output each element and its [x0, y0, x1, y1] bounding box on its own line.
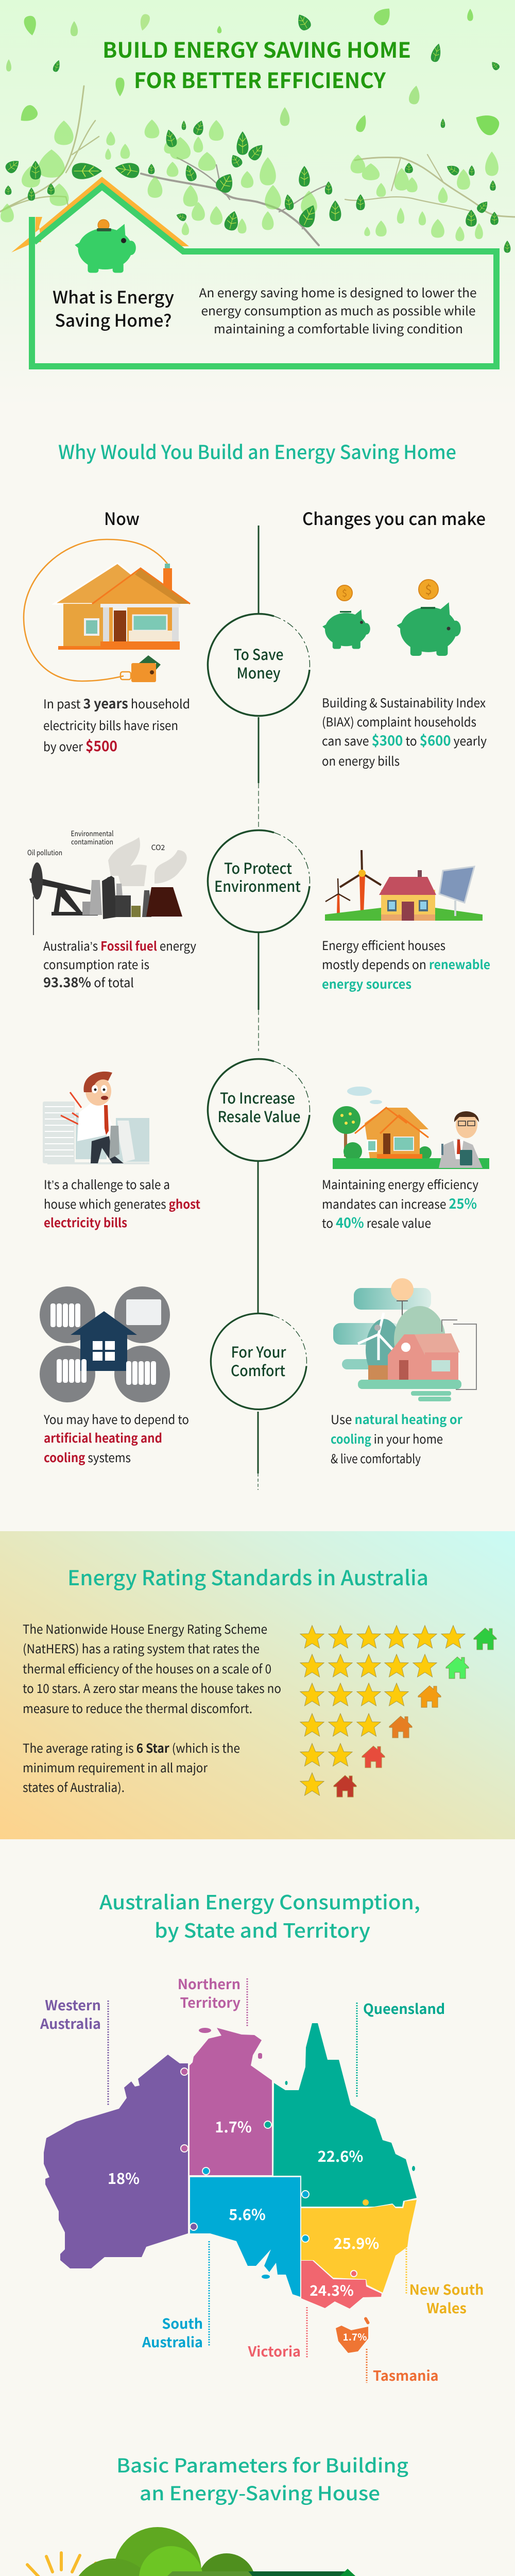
label: south australia: Australia	[142, 2331, 203, 2351]
text: ghost bills: house which generates ghost	[44, 1194, 200, 1212]
tree branches and leaves	[0, 86, 515, 253]
circle: to increase resale value	[208, 1059, 310, 1161]
circle: to save money: Money	[237, 662, 281, 683]
heading: why: Why Would You Build an Energy Saving Home	[58, 437, 456, 465]
icon: fossil fuel industry: contamination	[71, 837, 113, 847]
icon: house with power cord and wallet	[24, 539, 190, 682]
text: renewable	[322, 936, 490, 992]
roof	[167, 2571, 345, 2576]
panel: why build	[24, 437, 490, 1490]
heading: rating: Energy Rating Standards in Australia	[67, 1562, 428, 1591]
map: western australia	[44, 2055, 188, 2268]
intro text: maintaining a comfortable living condition	[214, 319, 463, 337]
text: resale value: to 40% resale value	[322, 1212, 431, 1232]
text: save money	[322, 693, 487, 769]
map: victoria	[301, 2261, 382, 2309]
icon: natural heating eco house	[333, 1278, 476, 1401]
panel: australian energy consumption	[40, 1887, 484, 2385]
text: natural heating: & live comfortably	[331, 1449, 421, 1467]
map: western australia: 18%	[108, 2167, 140, 2189]
intro text: energy consumption as much as possible while	[201, 301, 476, 319]
house outline frame	[11, 177, 496, 366]
text: nathers description: minimum requirement in all major	[23, 1758, 208, 1776]
circle: to save money: To Save	[234, 643, 283, 665]
title: FOR BETTER EFFICIENCY	[134, 63, 386, 94]
map: queensland	[264, 2023, 417, 2207]
text: renewable: Energy efficient houses	[322, 936, 445, 954]
circle: for your comfort: For Your	[231, 1341, 286, 1362]
text: resale value: Maintaining energy efficiency	[322, 1175, 478, 1193]
text: fossil fuel: Australia’s Fossil fuel energy	[43, 936, 196, 954]
text: artificial heating: artificial heating and	[44, 1428, 162, 1446]
text: save money: Building & Sustainability Index	[322, 693, 486, 711]
icon: fossil fuel industry: Oil pollution	[27, 848, 62, 858]
text: bills risen: by over $500	[43, 735, 117, 756]
heading: what is energy saving home: Saving Home?	[55, 307, 172, 332]
star rating scale	[300, 1625, 496, 1797]
panel: header	[0, 0, 515, 407]
text: nathers description: thermal efficiency of the houses on a scale of 0	[23, 1659, 271, 1677]
text: save money: on energy bills	[322, 751, 400, 769]
panel: energy rating standards	[0, 1531, 515, 1839]
icon: two piggy banks with coins: $	[342, 586, 347, 600]
heading: what is energy saving home: What is Energy	[53, 284, 174, 309]
text: nathers description: to 10 stars. A zero star means the house takes no	[23, 1679, 281, 1697]
map: south australia: 5.6%	[229, 2203, 266, 2225]
circle: to protect environment: Environment	[214, 875, 301, 896]
heading: consumption: by State and Territory	[154, 1915, 370, 1943]
text: fossil fuel: 93.38% of total	[43, 972, 134, 991]
text: nathers description: states of Australia).	[23, 1777, 125, 1795]
text: fossil fuel	[43, 936, 196, 991]
label: victoria: Victoria	[247, 2341, 301, 2361]
icon: two piggy banks with coins	[322, 580, 461, 656]
icon: house with wind turbines and solar panel	[325, 850, 483, 921]
map: victoria: 24.3%	[310, 2280, 354, 2300]
map: northern territory	[190, 2028, 272, 2175]
icon: two piggy banks with coins: $	[425, 580, 432, 598]
text: resale value	[322, 1175, 478, 1232]
title	[102, 33, 411, 94]
timeline lines	[258, 526, 259, 1490]
map: queensland: 22.6%	[318, 2145, 363, 2166]
label: queensland: Queensland	[363, 1998, 445, 2018]
text: nathers description: (NatHERS) has a rating system that rates the	[23, 1639, 260, 1657]
circle: to protect environment	[208, 830, 310, 932]
text: ghost bills	[44, 1175, 200, 1231]
intro text: An energy saving home is designed to lower the	[199, 283, 477, 301]
text: bills risen	[43, 693, 190, 756]
text: resale value: mandates can increase 25%	[322, 1193, 477, 1213]
text: nathers description	[23, 1619, 281, 1795]
text: natural heating: Use natural heating or	[331, 1410, 463, 1428]
panel: basic parameters	[26, 2457, 408, 2576]
intro text	[199, 283, 477, 337]
label: south australia: South	[162, 2313, 203, 2333]
falling leaves	[6, 4, 502, 138]
icon: fossil fuel industry: CO2	[151, 842, 165, 853]
text: nathers description: The Nationwide House Energy Rating Scheme	[23, 1619, 267, 1637]
text: artificial heating: You may have to depend to	[43, 1410, 189, 1428]
label: western australia: Western	[45, 1994, 101, 2014]
heading: consumption: Australian Energy Consumption,	[99, 1887, 420, 1915]
text: artificial heating	[43, 1410, 189, 1466]
map: tasmania: 1.7%	[343, 2330, 367, 2344]
map: northern territory: 1.7%	[215, 2115, 252, 2137]
circle: to increase resale value: To Increase	[220, 1087, 295, 1108]
column heading: changes: Changes you can make	[302, 505, 486, 530]
circle: for your comfort	[211, 1313, 306, 1410]
text: natural heating: cooling in your home	[331, 1429, 443, 1447]
text: artificial heating: cooling systems	[44, 1448, 131, 1466]
map dotted leader lines	[108, 1978, 406, 2383]
map: new south wales	[301, 2199, 417, 2293]
map: tasmania	[336, 2316, 370, 2353]
icon: stressed man with bills	[43, 1072, 149, 1163]
circle: to increase resale value: Resale Value	[217, 1105, 301, 1127]
text: bills risen: electricity bills have risen	[43, 716, 178, 734]
text: ghost bills: electricity bills	[44, 1213, 127, 1231]
icon: house for sale with agent	[333, 1087, 489, 1169]
heading: basic parameters	[116, 2450, 408, 2506]
text: nathers description: The average rating is 6 Star (which is the	[23, 1738, 240, 1756]
heading: consumption	[99, 1887, 420, 1943]
text: renewable: mostly depends on renewable	[322, 955, 490, 973]
label: western australia: Australia	[40, 2013, 101, 2033]
heading: basic parameters: an Energy-Saving House	[140, 2478, 380, 2506]
column heading: now: Now	[104, 505, 140, 530]
icon: sun	[22, 2553, 96, 2576]
circle: for your comfort: Comfort	[231, 1359, 285, 1381]
map: south australia	[190, 2167, 309, 2297]
text: fossil fuel: consumption rate is	[43, 955, 149, 973]
label: northern territory: Territory	[180, 1992, 241, 2012]
bushes	[32, 2527, 255, 2576]
icon: green piggy bank	[75, 219, 136, 273]
label: new south wales: New South	[409, 2279, 484, 2299]
label: new south wales: Wales	[426, 2297, 467, 2317]
text: natural heating	[331, 1410, 463, 1467]
icon: fossil fuel industry: Environmental	[71, 828, 114, 839]
icon: artificial heating and cooling	[40, 1286, 170, 1402]
text: ghost bills: It’s a challenge to sale a	[44, 1175, 170, 1193]
heading: what is energy saving home	[53, 284, 174, 332]
text: bills risen: In past 3 years household	[43, 693, 190, 713]
text: nathers description: measure to reduce the thermal discomfort.	[23, 1699, 252, 1717]
text: save money: (BIAX) complaint households	[322, 712, 476, 730]
circle: to save money	[208, 614, 310, 716]
label: northern territory: Northern	[178, 1973, 241, 1993]
heading: basic parameters: Basic Parameters for Building	[116, 2450, 408, 2478]
label: tasmania: Tasmania	[373, 2365, 439, 2385]
map: new south wales: 25.9%	[334, 2232, 379, 2253]
text: save money: can save $300 to $600 yearly	[322, 730, 487, 750]
text: renewable: energy sources	[322, 974, 411, 992]
icon: fossil fuel industry	[27, 828, 187, 935]
circle: to protect environment: To Protect	[224, 857, 292, 878]
title: BUILD ENERGY SAVING HOME	[102, 33, 411, 64]
house gable with insulation	[28, 2569, 495, 2576]
